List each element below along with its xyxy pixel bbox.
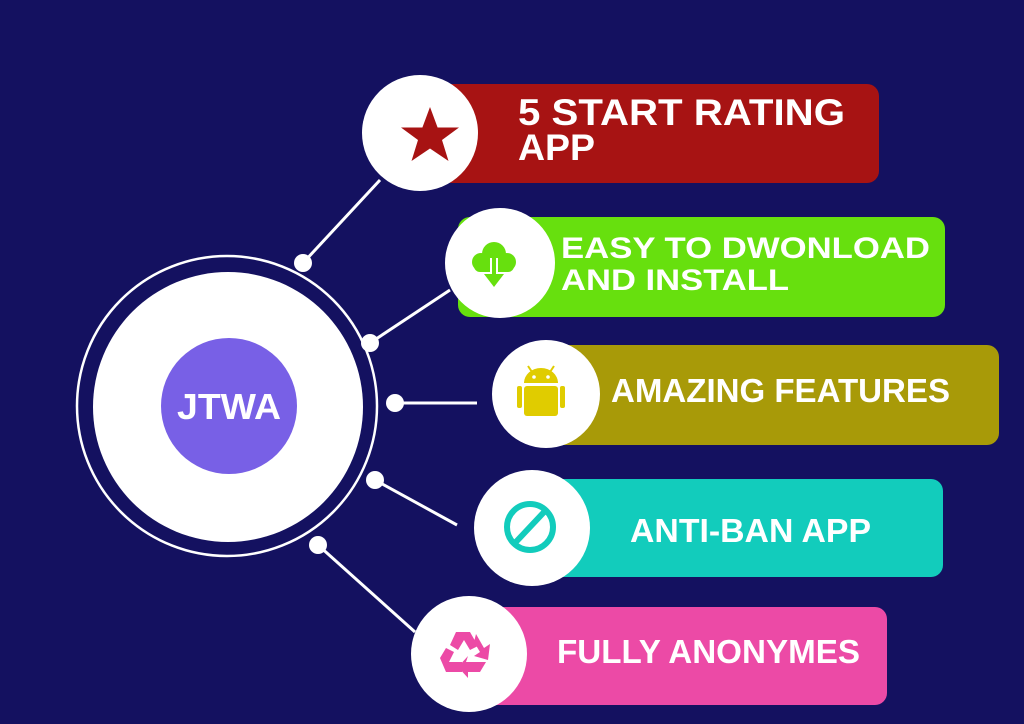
central hub: JTWA: JTWA <box>177 386 281 427</box>
item 2: easy to download: AND INSTALL <box>561 264 789 297</box>
item 3: amazing features: AMAZING FEATURES <box>611 372 950 409</box>
icon: android <box>517 366 565 416</box>
item 1: 5 start rating <box>362 75 879 191</box>
item 4: anti-ban app: ANTI-BAN APP <box>630 512 871 549</box>
icon: star <box>401 107 459 161</box>
item 2: easy to download <box>445 208 945 318</box>
item 4: anti-ban app <box>474 470 943 586</box>
item 2: easy to download: EASY TO DWONLOAD <box>561 232 930 265</box>
connector dots <box>294 254 404 554</box>
connector lines <box>303 180 477 632</box>
central hub: JTWA <box>77 256 377 556</box>
icon: prohibited <box>507 504 553 550</box>
item 1: 5 start rating: APP <box>518 127 595 168</box>
icon: cloud download <box>472 242 516 287</box>
item 1: 5 start rating: 5 START RATING <box>518 92 845 133</box>
item 5: fully anonymes <box>411 596 887 712</box>
item 3: amazing features <box>492 340 999 448</box>
icon: recycle <box>440 632 490 678</box>
item 5: fully anonymes: FULLY ANONYMES <box>557 633 860 670</box>
